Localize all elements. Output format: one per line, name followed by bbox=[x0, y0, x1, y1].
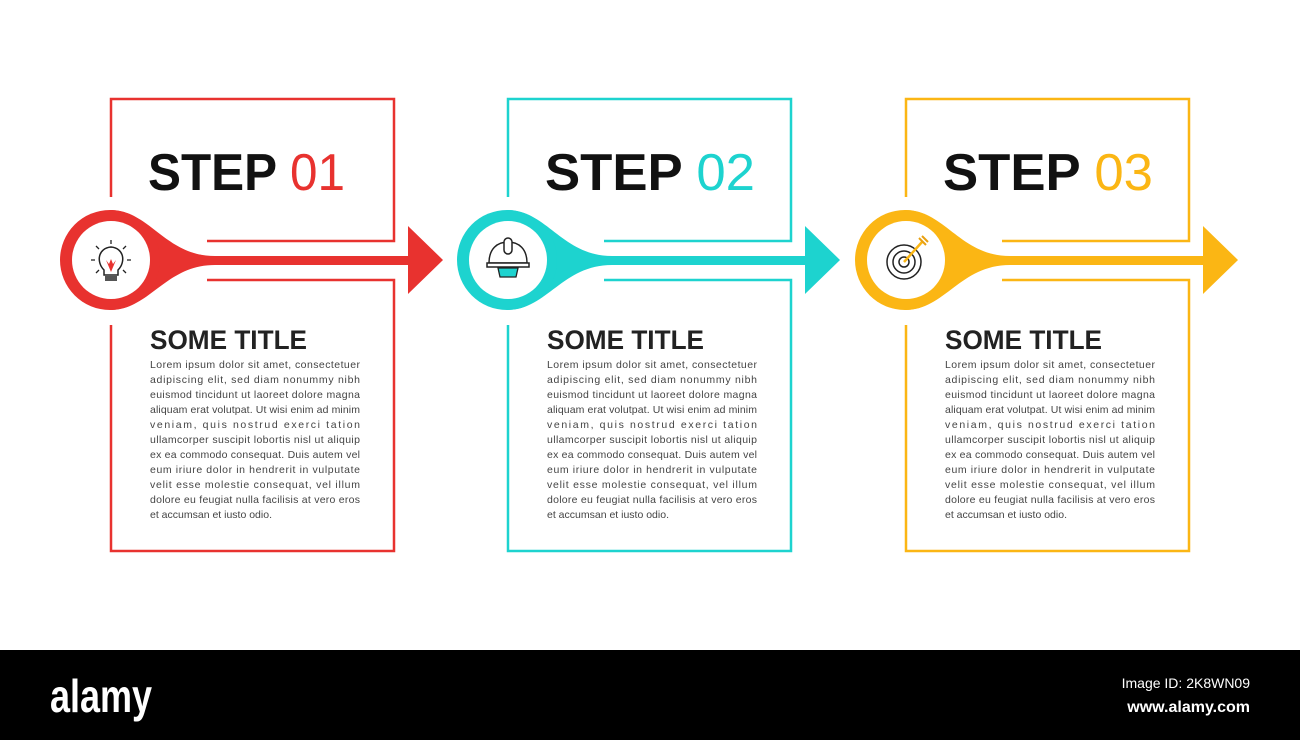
url: www.alamy.com bbox=[1126, 699, 1250, 716]
panel: step 1 bbox=[60, 99, 443, 551]
box outline: step 1 bbox=[111, 99, 394, 551]
heading: step 03: STEP 03 bbox=[943, 144, 1153, 202]
footer bar bbox=[0, 650, 1300, 740]
arrow: step 2 bbox=[457, 210, 840, 310]
image id: Image ID: 2K8WN09 bbox=[1122, 675, 1250, 691]
text block: step 2 bbox=[547, 359, 758, 521]
icon: target bbox=[867, 221, 945, 299]
heading: step 01: STEP 01 bbox=[148, 144, 345, 202]
title: some title 2: SOME TITLE bbox=[547, 325, 704, 355]
text block: step 3 bbox=[945, 359, 1156, 521]
title: some title 3: SOME TITLE bbox=[945, 325, 1102, 355]
panel: step 2 bbox=[457, 99, 840, 551]
title: some title 1: SOME TITLE bbox=[150, 325, 307, 355]
logo: alamy: alamy bbox=[50, 670, 152, 722]
arrow: step 1 bbox=[60, 210, 443, 310]
icon: helmet gear bbox=[469, 221, 547, 299]
icon: light bulb bbox=[72, 221, 150, 299]
box outline: step 2 bbox=[508, 99, 791, 551]
panel: step 3 bbox=[855, 99, 1238, 551]
arrow: step 3 bbox=[855, 210, 1238, 310]
box outline: step 3 bbox=[906, 99, 1189, 551]
text block: step 1 bbox=[150, 359, 360, 521]
heading: step 02: STEP 02 bbox=[545, 144, 755, 202]
